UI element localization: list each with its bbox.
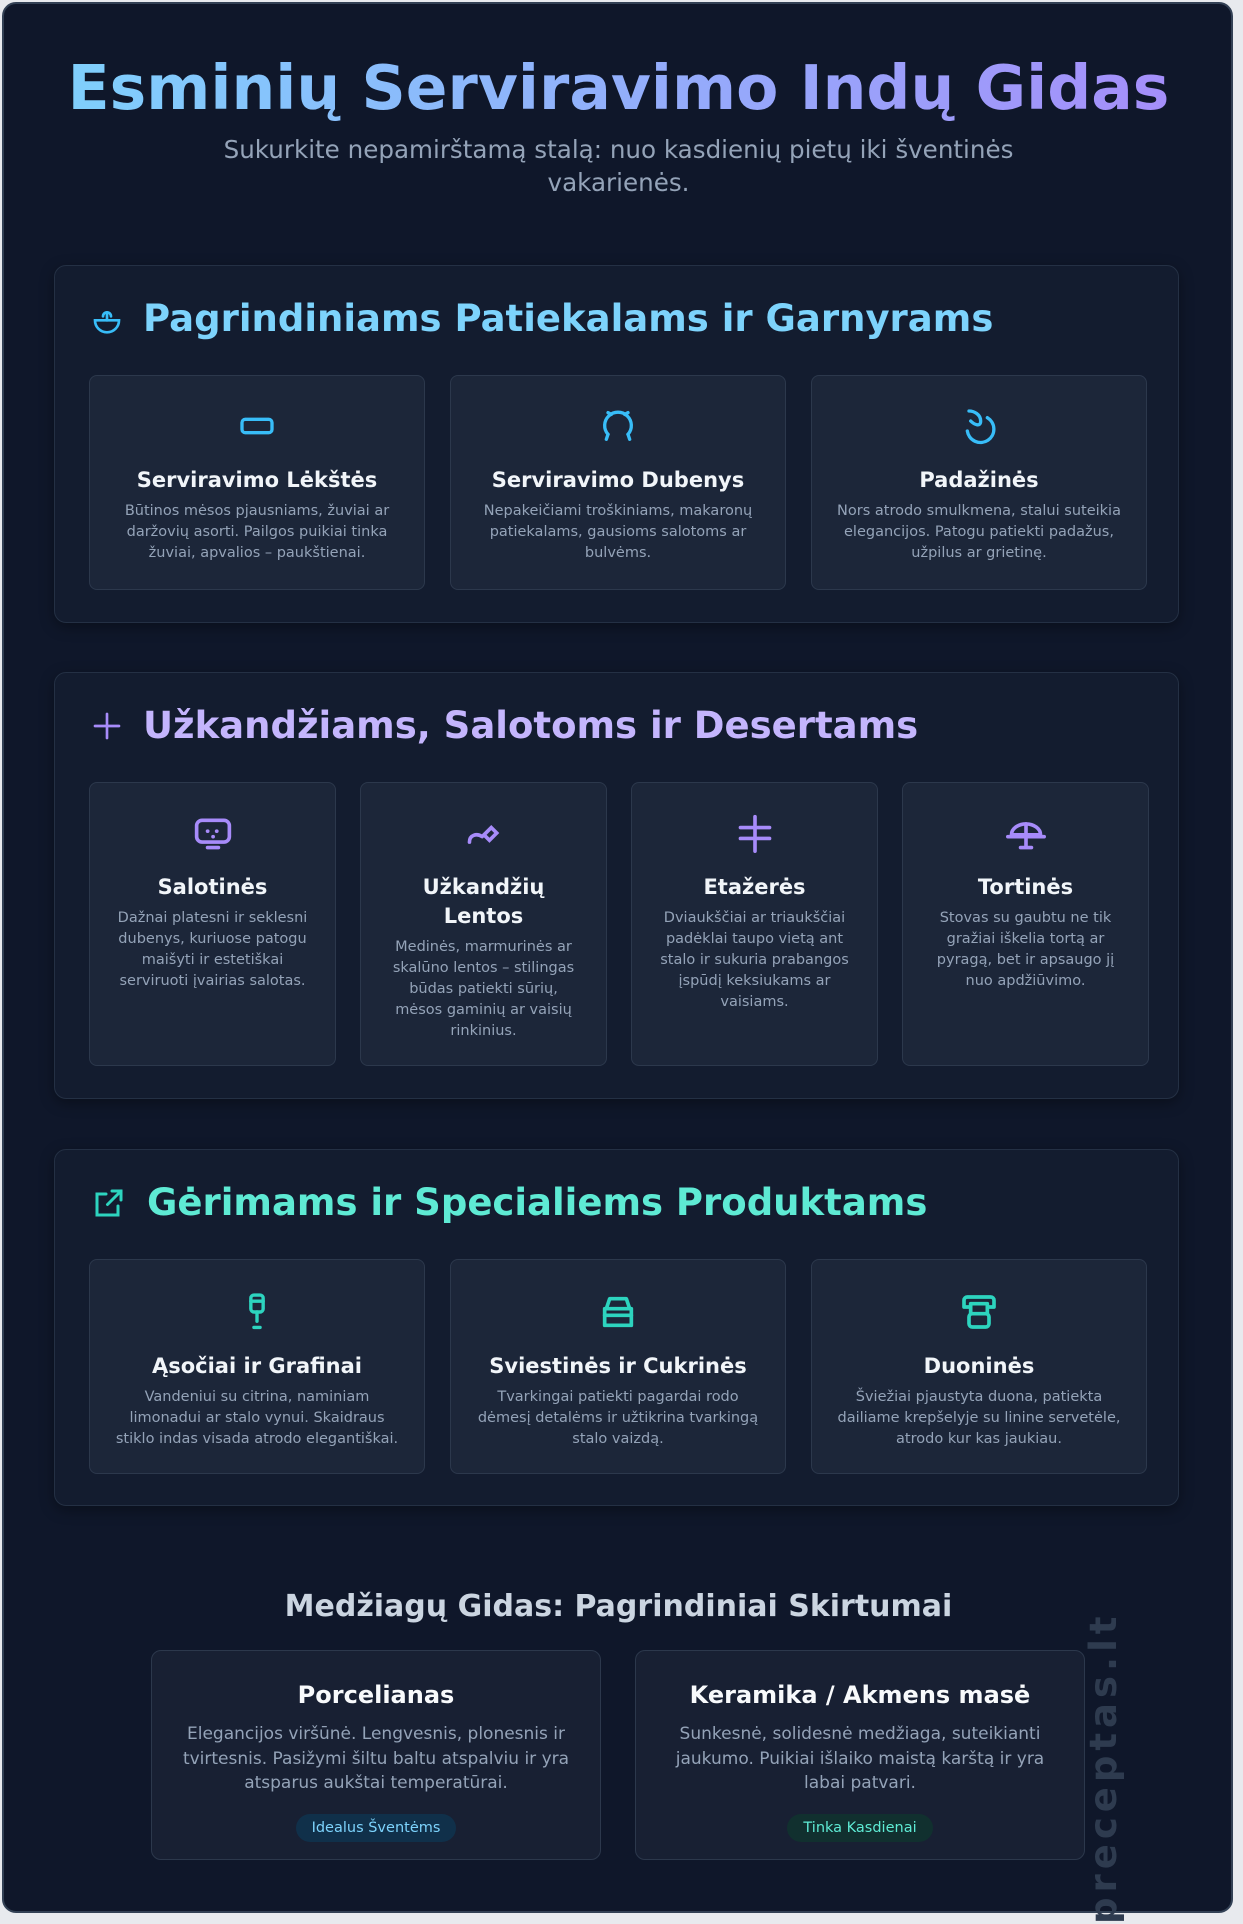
subtitle: Sukurkite nepamirštamą stalą: nuo kasdienių pietų iki šventinės vakarienės.	[224, 135, 1013, 197]
heading: main dishes: Pagrindiniams Patiekalams ir Garnyrams	[143, 297, 993, 340]
card: plates	[89, 375, 425, 590]
watermark: preceptas.lt	[1082, 1612, 1125, 1924]
title: Esminių Serviravimo Indų Gidas	[68, 52, 1169, 124]
card: ceramics	[635, 1650, 1085, 1860]
card: bowls	[450, 375, 786, 590]
badge: holidays: Idealus Šventėms	[312, 1820, 440, 1836]
card: butter dishes: Tvarkingai patiekti pagardai rodo dėmesį detalėms ir užtikrina tvarkingą stalo vaizdą.	[478, 1389, 758, 1447]
card: jugs	[89, 1259, 425, 1474]
card: cake stands: Stovas su gaubtu ne tik gražiai iškelia tortą ar pyragą, bet ir apsaugo jį nuo apdžiūvimo.	[937, 910, 1114, 989]
card: tiered stands: Etažerės	[703, 875, 806, 899]
card: butter dishes	[450, 1259, 786, 1474]
card: butter dishes: Sviestinės ir Cukrinės	[489, 1354, 747, 1378]
card: bowls: Nepakeičiami troškiniams, makaronų patiekalams, gausioms salotoms ar bulvėms.	[484, 503, 752, 561]
card: bread baskets: Šviežiai pjaustyta duona, patiekta dailiame krepšelyje su linine servetėle, atrodo kur kas jaukiau.	[838, 1389, 1120, 1447]
card: cake stands: Tortinės	[978, 875, 1073, 899]
panel: main dishes	[54, 265, 1179, 623]
badge: holidays	[296, 1814, 456, 1842]
card: salad bowls	[89, 782, 336, 1066]
badge: everyday	[787, 1814, 933, 1842]
heading: appetizers: Užkandžiams, Salotoms ir Desertams	[143, 704, 918, 747]
heading: drinks: Gėrimams ir Specialiems Produktams	[147, 1181, 927, 1224]
card: plates: Būtinos mėsos pjausniams, žuviai ar daržovių asorti. Pailgos puikiai tinka žuviai, apvalios – paukštienai.	[125, 503, 389, 561]
badge: everyday: Tinka Kasdienai	[803, 1820, 917, 1836]
card: jugs: Ąsočiai ir Grafinai	[152, 1354, 362, 1378]
card: plates: Serviravimo Lėkštės	[137, 468, 377, 492]
card: salad bowls: Dažnai platesni ir seklesni dubenys, kuriuose patogu maišyti ir estetiškai serviruoti įvairias salotas.	[118, 910, 307, 989]
heading: materials: Medžiagų Gidas: Pagrindiniai Skirtumai	[285, 1589, 952, 1624]
card: cake stands	[902, 782, 1149, 1066]
card: porcelain: Porcelianas	[298, 1681, 454, 1709]
card: bowls: Serviravimo Dubenys	[492, 468, 744, 492]
card: tiered stands: Dviaukščiai ar triaukščiai padėklai taupo vietą ant stalo ir sukuria prabangos įspūdį keksiukams ar vaisiams.	[660, 910, 849, 1010]
card: boards	[360, 782, 607, 1066]
card: bread baskets	[811, 1259, 1147, 1474]
card: ceramics: Sunkesnė, solidesnė medžiaga, suteikianti jaukumo. Puikiai išlaiko maistą karštą ir yra labai patvari.	[676, 1724, 1044, 1793]
card: gravy boats	[811, 375, 1147, 590]
card: boards: Medinės, marmurinės ar skalūno lentos – stilingas būdas patiekti sūrių, mėsos gaminių ar vaisių rinkinius.	[393, 939, 574, 1039]
card: tiered stands	[631, 782, 878, 1066]
card: porcelain: Elegancijos viršūnė. Lengvesnis, plonesnis ir tvirtesnis. Pasižymi šiltu baltu atspalviu ir yra atsparus aukštai temperatūrai.	[183, 1724, 569, 1793]
panel: drinks	[54, 1149, 1179, 1506]
card: gravy boats: Padažinės	[919, 468, 1039, 492]
panel: appetizers	[54, 672, 1179, 1099]
card: boards: Užkandžių Lentos	[423, 875, 544, 928]
card: salad bowls: Salotinės	[158, 875, 267, 899]
card: bread baskets: Duoninės	[924, 1354, 1034, 1378]
card: jugs: Vandeniui su citrina, naminiam limonadui ar stalo vynui. Skaidraus stiklo indas visada atrodo elegantiškai.	[116, 1389, 398, 1447]
card: ceramics: Keramika / Akmens masė	[690, 1681, 1030, 1709]
card: porcelain	[151, 1650, 601, 1860]
card: gravy boats: Nors atrodo smulkmena, stalui suteikia elegancijos. Patogu patiekti padažus, užpilus ar grietinę.	[837, 503, 1121, 561]
